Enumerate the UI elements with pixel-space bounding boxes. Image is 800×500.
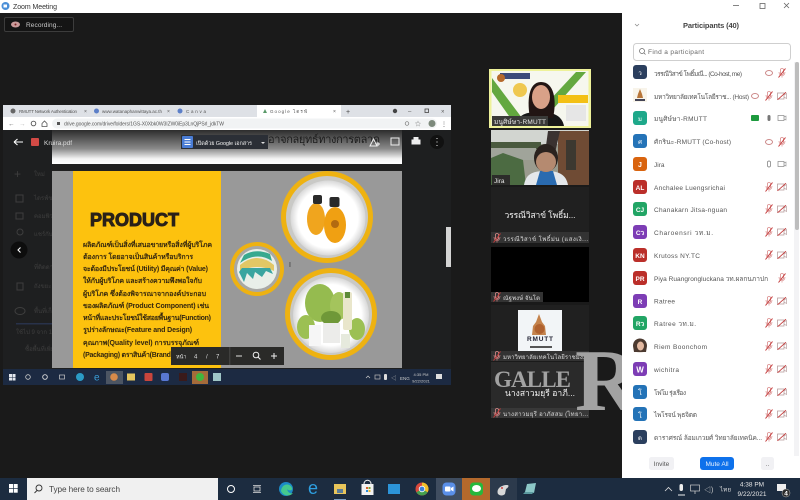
- row 12: Ratree วท.ม.: [654, 321, 696, 328]
- row 9: Krutoss NY.TC: [654, 253, 700, 260]
- product description: (Packaging) ตราสินค้า(Brand): [83, 350, 173, 359]
- participants heading: Participants (40): [683, 21, 740, 30]
- video tile: host with slide background: [489, 69, 591, 128]
- row 15: โ: [638, 388, 642, 397]
- row 11: Ratree: [654, 298, 675, 306]
- browser tab bar: ×: [167, 109, 170, 115]
- browser tab bar: Canva: [186, 109, 206, 114]
- open with google docs button: เปิดด้วย Google เอกสาร: [196, 140, 252, 147]
- row 1: ว: [638, 71, 642, 77]
- row 17: ด: [638, 436, 642, 442]
- invite button: [649, 457, 674, 470]
- browser tab bar: –: [408, 109, 412, 115]
- browser tab bar: www.watanaphanwittaya.ac.th: [102, 109, 162, 114]
- pdf page controls: 7: [216, 354, 220, 360]
- system tray: [665, 482, 790, 498]
- row 9: KN: [635, 253, 645, 260]
- dimmed drive sidebar: คอมพิวเตอร์: [34, 212, 66, 220]
- video tile: rmutt logo: RMUTT: [527, 336, 553, 343]
- video tile: name only: วรรณีวิสาข์ โพธิ์ม่น (แสงเงิ...: [503, 234, 588, 243]
- video tile: rmutt logo: [491, 305, 589, 361]
- video tile: name only: [491, 187, 589, 243]
- system tray: 4:38 PM: [740, 482, 764, 488]
- product description: คุณภาพ(Quality level) การบรรจุภัณฑ์: [83, 338, 199, 347]
- shared screen window: [3, 105, 451, 385]
- row 7: CJ: [636, 207, 645, 214]
- product description: ให้กับผู้บริโภค และสร้างความพึงพอใจกับ: [83, 276, 203, 286]
- product description: ผู้บริโภค ซึ่งต้องพิจารณาจากองค์ประกอบ: [83, 288, 207, 299]
- row 8: Charoensri วท.ม.: [654, 230, 713, 237]
- participants scrollbar: [794, 62, 799, 456]
- video tile: host with slide background: มนูศิษ์ษา-RMUTT: [494, 118, 546, 126]
- panel: participants: [622, 0, 800, 478]
- row 5: Jira: [654, 162, 665, 169]
- row 4: ศ: [638, 139, 642, 146]
- row 8: [633, 225, 786, 239]
- row 14: [633, 362, 786, 376]
- browser address bar: →: [19, 121, 26, 128]
- invite button: Invite: [654, 461, 670, 468]
- pdf page controls: /: [206, 354, 208, 360]
- find a participant search: Find a participant: [648, 49, 704, 56]
- search box: Type here to search: [49, 485, 120, 494]
- row 17: ดาราศรณ์ ล้อมเกวยศ์ วิทยาลัยเทคนิค...: [654, 434, 762, 442]
- dimmed drive sidebar: พื้นที่เก็บข้อมูล: [34, 305, 71, 315]
- circle: orange juice bottles: [281, 171, 373, 263]
- row 5: J: [638, 162, 642, 169]
- product description: หน้าที่และประโยชน์ใช้สอยพื้นฐาน(Function): [83, 311, 211, 323]
- row 17: [633, 430, 786, 444]
- inner windows taskbar: ENG: [400, 376, 410, 381]
- open with google docs button: [181, 135, 268, 149]
- product description: ของผลิตภัณฑ์ (Product Component) เช่น: [83, 301, 209, 310]
- tile name overlay: นางสาวมยุรี อาภี...: [505, 388, 575, 399]
- video tile: black camera off: ณัฐพงษ์ จันโต: [503, 294, 540, 302]
- row 2: [633, 88, 786, 102]
- browser tab bar: ×: [441, 110, 445, 116]
- pdf page controls: หน้า: [176, 354, 186, 360]
- browser tab bar: ×: [84, 109, 87, 115]
- row 13: [633, 338, 786, 353]
- start button: [9, 484, 18, 493]
- viewer scrollbar: [446, 227, 451, 267]
- inner windows taskbar: ◁: [391, 375, 397, 382]
- dimmed drive sidebar: ถังขยะ: [34, 283, 51, 290]
- row 11: R: [638, 299, 643, 306]
- row 15: โฟโม รุ่งเรือง: [654, 389, 686, 397]
- mute all button: Mute All: [705, 461, 729, 468]
- participants heading: [635, 21, 740, 30]
- browser tab bar: ×: [333, 109, 336, 115]
- dimmed drive sidebar: ใหม่: [34, 170, 45, 178]
- windows taskbar: [0, 478, 800, 500]
- window title bar: Zoom Meeting: [13, 4, 57, 11]
- inner windows taskbar: e: [94, 372, 100, 384]
- heading: product: PRODUCT: [90, 210, 179, 230]
- browser address bar: drive.google.com/drive/folders/1GS-X0Xbk0W3IZW0iEp3LnQjPSrl_jdkTW: [64, 122, 224, 128]
- row 11: [633, 294, 786, 308]
- dimmed drive sidebar: ไดรฟ์ของฉัน: [33, 194, 67, 202]
- row 13: Riem Boonchom: [654, 344, 707, 351]
- dimmed drive sidebar: แชร์กับฉัน: [34, 230, 61, 238]
- product description: ผลิตภัณฑ์เป็นสิ่งที่เสนอขายหรือสิ่งที่ผู้บริโภค: [83, 239, 212, 250]
- system tray: ◁): [704, 486, 713, 494]
- row 8: Cว: [636, 230, 645, 237]
- participant rows: [633, 65, 786, 444]
- viewer action icons: [370, 135, 444, 149]
- drive viewer backdrop: [3, 130, 451, 369]
- viewer top bar: file name: Kruira.pdf: [44, 140, 72, 147]
- row 1: วรรณีวิสาข์ โพธิ์มณี... (Co-host, me): [654, 69, 742, 78]
- row 10: PR: [635, 276, 645, 283]
- panel: yellow product text: [73, 171, 221, 368]
- find a participant search: [634, 44, 790, 60]
- dimmed drive sidebar: ใช้ไป 9 จาก 15 GB: [16, 328, 66, 336]
- row 12: Rว: [636, 321, 645, 328]
- system tray: ไทย: [719, 486, 731, 494]
- row 7: [633, 202, 786, 216]
- video tile: jira: Jira: [494, 178, 505, 185]
- pdf page header strip: [52, 130, 402, 164]
- browser address bar: [3, 117, 451, 130]
- taskbar app icons: [228, 478, 536, 500]
- page title behind toolbar: อาจกลยุทธ์ทางการตลาด: [268, 133, 380, 146]
- dark gap between pages: [52, 164, 402, 171]
- dimmed drive sidebar: ที่ติดดาว: [34, 263, 56, 271]
- row 6: Anchalee Luengsrichai: [654, 185, 725, 192]
- recording badge: [4, 18, 74, 32]
- pdf page controls: [171, 347, 284, 365]
- system tray: 9/22/2021: [738, 491, 767, 498]
- more button: [761, 457, 774, 470]
- window title bar: [0, 0, 800, 13]
- row 6: AL: [636, 185, 644, 192]
- row 12: [633, 316, 786, 330]
- dimmed drive sidebar: [14, 167, 71, 353]
- circle: coconut products: [285, 268, 377, 360]
- browser tab bar: [3, 105, 451, 117]
- row 16: โ: [638, 411, 642, 420]
- dimmed drive sidebar: +: [14, 167, 21, 181]
- inner windows taskbar: 9/22/2021: [412, 378, 431, 384]
- more button: ..: [766, 461, 769, 468]
- video tile: rmutt logo: มหาวิทยาลัยเทคโนโลยีราชมง...: [503, 353, 588, 361]
- browser tab bar: RMUTT Network Authentication: [19, 109, 77, 114]
- row 15: [633, 385, 786, 399]
- browser tab bar: Google ไดรฟ์: [270, 108, 307, 114]
- system tray: 4: [784, 490, 788, 498]
- video tile: name with watermark: [491, 362, 589, 418]
- row 5: [633, 157, 786, 171]
- circle: small product pack: [230, 242, 284, 296]
- recording badge: Recording...: [26, 22, 62, 29]
- video tile: black camera off: [491, 247, 589, 302]
- row 10: [633, 271, 786, 285]
- row 7: Chanakarn Jitsa-nguan: [654, 207, 727, 214]
- mute all button: [700, 457, 734, 470]
- row 3: [633, 111, 786, 125]
- product description: ต้องการ โดยอาจเป็นสินค้าหรือบริการ: [83, 252, 193, 261]
- row 16: [633, 407, 786, 421]
- video tile: name with watermark: นางสาวมยุรี อาภัสสม (ไทยา...: [503, 410, 588, 418]
- video tile: name only: วรรณีวิสาข์ โพธิ์ม...: [504, 209, 576, 220]
- inner windows taskbar: [3, 369, 451, 385]
- gallery watermark: [494, 333, 640, 430]
- row 3: มนูศิษ์ษา-RMUTT: [654, 115, 707, 123]
- product description: รูปร่างลักษณะ(Feature and Design): [83, 326, 192, 335]
- row 10: Piya Ruangrongluckana วท.ผลกนภาปก: [654, 276, 768, 283]
- row 2: มหาวิทยาลัยเทคโนโลยีราช... (Host): [654, 93, 749, 101]
- product description: จะต้องมีประโยชน์ (Utility) มีคุณค่า (Value): [83, 264, 208, 273]
- taskbar app icons: e: [308, 478, 318, 498]
- window controls: [733, 3, 789, 8]
- browser tab bar: +: [346, 109, 350, 116]
- gallery watermark: R: [575, 333, 640, 430]
- dimmed drive sidebar: ซื้อพื้นที่เพิ่ม: [25, 343, 55, 353]
- video tile: jira: [491, 130, 589, 185]
- row 3: ม: [638, 117, 642, 123]
- row 9: [633, 248, 786, 262]
- row 4: [633, 134, 786, 148]
- previous page button: [10, 242, 28, 258]
- viewer top bar: file name: [14, 138, 72, 147]
- row 4: ศักรินะ-RMUTT (Co-host): [654, 138, 731, 146]
- gallery watermark: GALLE: [494, 367, 571, 392]
- search box: [27, 478, 218, 500]
- inner windows taskbar: 4:35 PM: [414, 372, 428, 377]
- row 1: [633, 65, 786, 79]
- browser address bar: ⋮: [441, 122, 447, 128]
- mouse cursor: I: [289, 262, 291, 269]
- row 14: wichitra: [653, 367, 679, 374]
- browser address bar: ←: [8, 121, 14, 128]
- browser address bar: ☆: [415, 120, 421, 128]
- row 6: [633, 180, 786, 194]
- product description: [83, 239, 212, 359]
- pdf page controls: 4: [194, 354, 198, 360]
- row 16: ไพโรจน์ พุธจิตต: [653, 411, 697, 419]
- row 14: W: [636, 366, 644, 374]
- slide grey backdrop: [52, 171, 402, 368]
